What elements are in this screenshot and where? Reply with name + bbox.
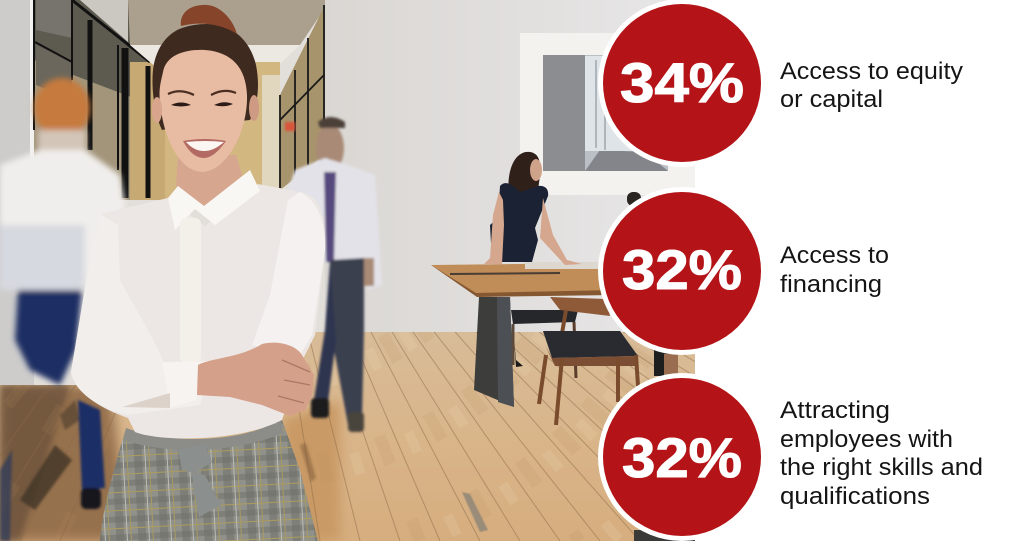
face (160, 50, 247, 172)
label: qualifications (780, 483, 930, 510)
photo: office background (0, 0, 695, 541)
sleeves (71, 214, 210, 415)
label: Access to equity (780, 58, 963, 85)
front chair (550, 297, 610, 316)
circle badge 32%: 32% (622, 238, 742, 301)
label: the right skills and (780, 454, 983, 481)
white right-hand panel (695, 0, 1024, 541)
stat: 34% access to equity or capital (598, 0, 963, 167)
back chair (511, 310, 578, 324)
label: financing (780, 271, 882, 298)
eyes and smile (171, 102, 233, 106)
shirt (71, 184, 325, 438)
circle badge 32%: 32% (622, 426, 742, 489)
standing woman in navy dress (484, 152, 582, 265)
neck (176, 155, 243, 206)
circle badge 32% (598, 373, 766, 541)
blurred man walking behind (288, 117, 382, 432)
trouser waistband (124, 421, 283, 450)
label: Attracting (780, 397, 890, 424)
table top (431, 263, 615, 297)
photo: smiling woman in white shirt (71, 5, 325, 541)
circle badge 32% (598, 187, 766, 355)
glass corridor left (34, 0, 172, 200)
seated table and chair group (431, 192, 678, 425)
stat: 32% access to financing (598, 187, 889, 355)
framed picture (520, 33, 695, 195)
blurred man in foreground (0, 78, 125, 385)
label: or capital (780, 86, 883, 113)
circle badge 34%: 34% (620, 51, 744, 114)
fabric bow (178, 445, 221, 517)
hair (152, 24, 258, 130)
label: Access to (780, 242, 889, 269)
hand (197, 343, 314, 416)
label: employees with (780, 426, 953, 453)
circle badge 34% (598, 0, 766, 167)
trousers under shirt (100, 420, 318, 541)
table pedestal (474, 297, 514, 407)
wood floor (0, 332, 695, 541)
stat: 32% attracting employees (598, 373, 983, 541)
foreground man's leg and shoe (78, 400, 105, 509)
ceiling and hallway (128, 0, 325, 200)
